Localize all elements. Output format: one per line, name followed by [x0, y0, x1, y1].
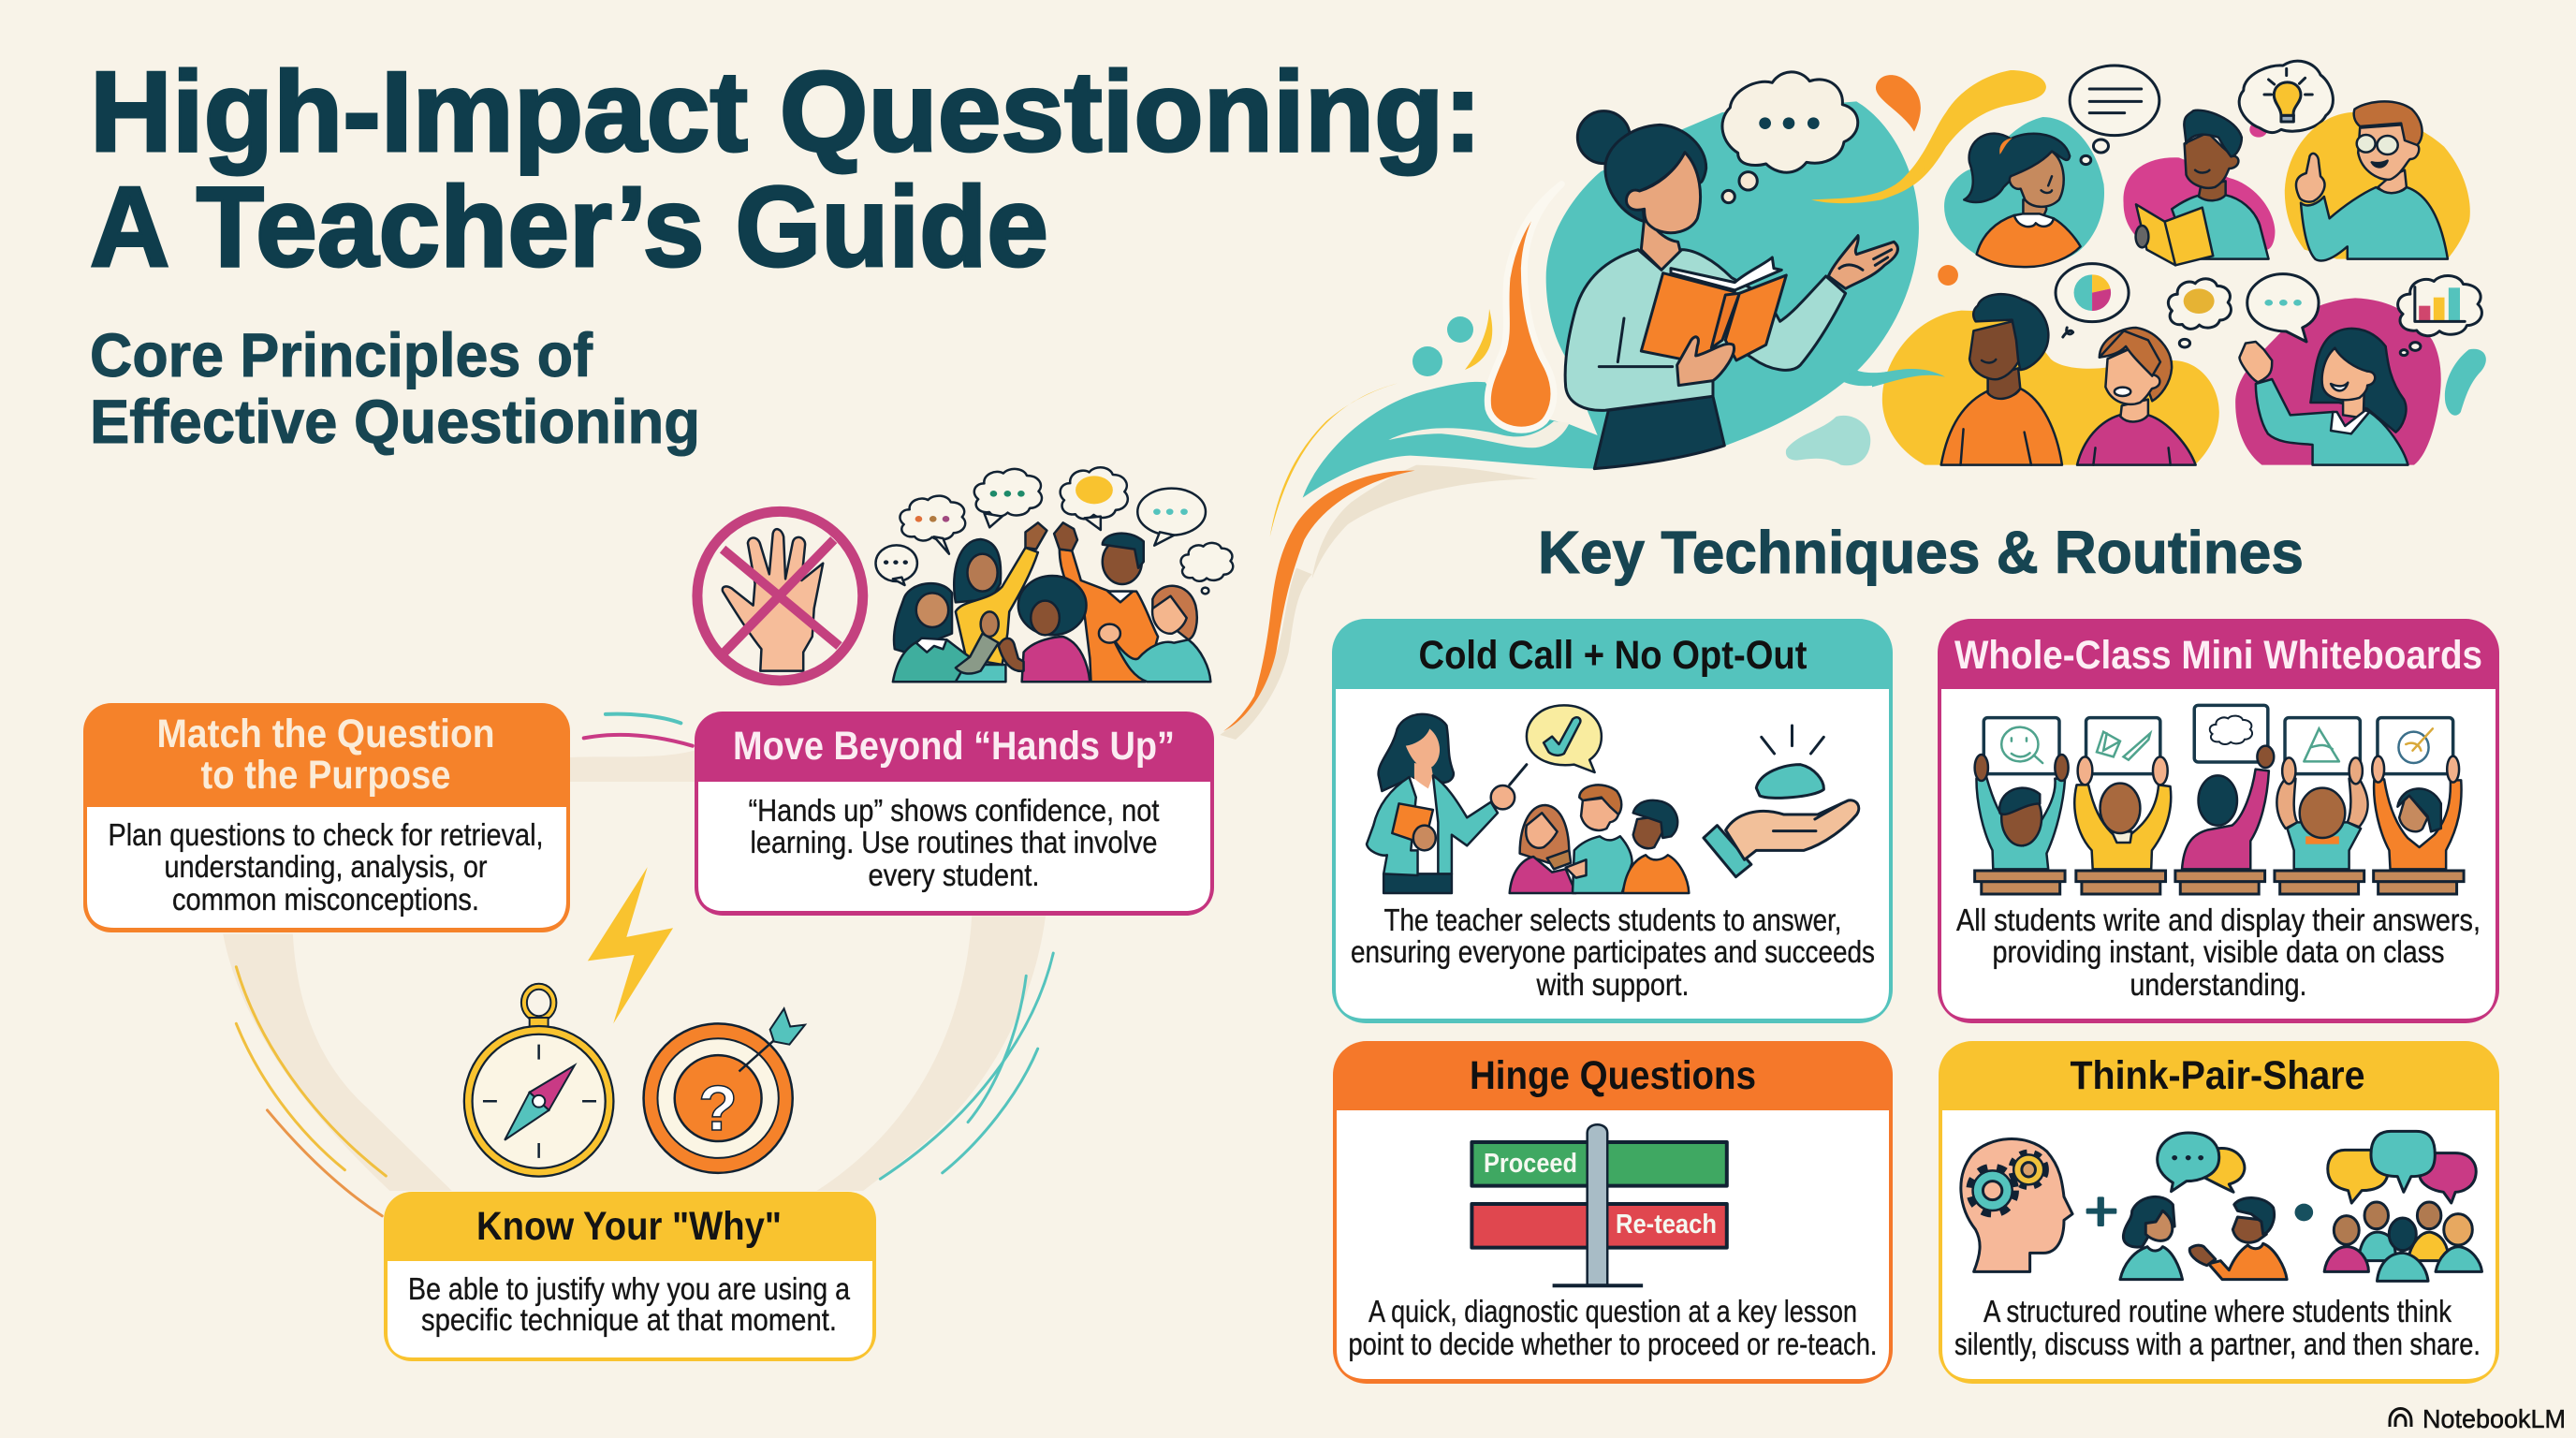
student four: [2276, 757, 2368, 869]
yellow blob: [1882, 311, 2219, 465]
principle card: know your why: [384, 1192, 876, 1361]
idea cloud with scribble: [2168, 279, 2231, 347]
subtitle: core principles: Core Principles of: [90, 320, 593, 389]
illustration: think plus pair plus share: [1961, 1131, 2481, 1281]
card heading: to the Purpose: [200, 753, 451, 798]
illustration: signpost: [1471, 1124, 1727, 1285]
teal leaf: [2445, 349, 2486, 416]
icon: lightning bolt: [588, 867, 673, 1023]
whiteboard drawings: [2001, 727, 2433, 763]
principle card: match the question: [83, 703, 570, 932]
principle card: move beyond hands up: [695, 712, 1214, 916]
title: [90, 48, 1482, 290]
student: boy with book: [2123, 110, 2275, 265]
student one: [1975, 755, 2069, 869]
subtitle: core principles: Effective Questioning: [90, 387, 700, 456]
student: boy in magenta: [2077, 328, 2196, 465]
student: boy in orange: [1941, 294, 2062, 465]
subtitle: core principles: [90, 320, 700, 456]
bubble contents: [884, 476, 1188, 565]
icon: compass: [468, 987, 609, 1172]
illustration: bottom row of students: [1872, 264, 2486, 465]
card text: [749, 793, 1159, 892]
title: High-Impact Questioning:: [90, 48, 1482, 175]
card text: learning. Use routines that involve: [751, 825, 1157, 859]
technique card: cold call: [1332, 619, 1893, 1023]
teacher thought cloud: [1722, 72, 1858, 203]
illustration: teacher with open book: [1303, 70, 2046, 498]
answer bubble with check: [1527, 705, 1602, 772]
yellow swoosh: [1811, 70, 2046, 203]
card heading: Cold Call + No Opt-Out: [1419, 633, 1807, 678]
card heading: [157, 712, 494, 798]
card text: specific technique at that moment.: [421, 1302, 837, 1337]
card text: “Hands up” shows confidence, not: [749, 793, 1159, 828]
card heading: Hinge Questions: [1470, 1053, 1756, 1098]
teal wave: [1841, 366, 1945, 386]
speech bubble with dots: [2247, 274, 2319, 342]
heading: key techniques: Key Techniques & Routines: [1538, 519, 2304, 586]
connecting swooshes from hero to cards: [1220, 383, 1538, 740]
open hand with stone: [1704, 726, 1859, 877]
card text: [109, 817, 543, 917]
share: bubbles and group: [2324, 1131, 2481, 1281]
pie chart bubble: [2056, 264, 2129, 337]
student: man with glasses: [2285, 101, 2470, 261]
whiteboards: [1983, 705, 2453, 774]
card text: ensuring everyone participates and succeeds: [1351, 934, 1875, 969]
card text: A quick, diagnostic question at a key lesson: [1368, 1294, 1857, 1328]
illustration: top row of students: [1944, 61, 2470, 267]
icon: question target with arrow: [644, 1008, 805, 1173]
illustration: teacher calling on students: [1367, 705, 1859, 893]
card text: The teacher selects students to answer,: [1383, 902, 1842, 937]
card text: Plan questions to check for retrieval,: [109, 817, 543, 852]
bar chart cloud: [2398, 276, 2481, 356]
card heading: Move Beyond “Hands Up”: [733, 724, 1175, 769]
orange teardrop: [1876, 75, 1921, 132]
plus and dot: [2086, 1196, 2313, 1226]
lightbulb cloud: [2239, 61, 2341, 149]
NotebookLM logo and wordmark: NotebookLM: [2422, 1404, 2566, 1433]
question mark: ?: [698, 1073, 738, 1144]
speech bubbles above crowd: [876, 467, 1233, 594]
teal background blob and swoosh: [1303, 101, 1919, 498]
white wave accent: [1388, 421, 1570, 448]
card text: All students write and display their answers,: [1956, 902, 2481, 937]
card text: A structured routine where students think: [1983, 1294, 2452, 1328]
light teal blob: [1786, 416, 1870, 465]
head with gears: [1961, 1139, 2072, 1271]
card heading: Whole-Class Mini Whiteboards: [1954, 633, 2482, 678]
three students: [1510, 785, 1689, 893]
card text: silently, discuss with a partner, and then share.: [1954, 1327, 2481, 1361]
card text: with support.: [1536, 967, 1689, 1002]
card text: [1954, 1294, 2481, 1361]
teacher: [1367, 714, 1527, 893]
card text: Be able to justify why you are using a: [408, 1271, 851, 1306]
card heading: Think-Pair-Share: [2071, 1053, 2364, 1098]
yellow swoosh front part: [1811, 154, 1925, 203]
pair: bubbles and people: [2120, 1133, 2287, 1280]
card text: every student.: [869, 858, 1039, 892]
card heading: Know Your "Why": [476, 1204, 782, 1249]
card heading: Match the Question: [157, 712, 494, 756]
speech bubble with lines: [2070, 66, 2159, 165]
card text: providing instant, visible data on class: [1992, 934, 2445, 969]
teal wave tip: [1872, 369, 1945, 387]
magenta blob: [2235, 298, 2441, 465]
card text: [1351, 902, 1875, 1002]
title: A Teacher’s Guide: [90, 163, 1048, 290]
crowd of five students: [893, 522, 1210, 682]
sign labels: Proceed: [1484, 1149, 1577, 1179]
decorative teal dots and yellow curl: [1412, 309, 1492, 376]
icon: crossed-out raised hand: [697, 511, 863, 681]
technique card: whole-class mini whiteboards: [1938, 619, 2499, 1023]
sign labels: Re-teach: [1616, 1210, 1717, 1240]
student two: [2074, 756, 2171, 869]
student: girl with ponytail: [1944, 117, 2104, 267]
illustration: students holding whiteboards: [1975, 705, 2464, 894]
row of desks: [1975, 871, 2464, 894]
teacher figure: [1565, 111, 1897, 469]
card text: understanding, analysis, or: [165, 849, 488, 884]
student five: [2372, 756, 2462, 869]
technique card: hinge questions: [1333, 1041, 1893, 1384]
card text: understanding.: [2130, 967, 2306, 1002]
cycle: connectors between principles: [223, 714, 1053, 1216]
orange dot: [1938, 265, 1958, 286]
student: girl waving: [2239, 329, 2408, 465]
card text: [1956, 902, 2481, 1002]
student three: [2182, 746, 2274, 869]
card text: [408, 1271, 851, 1337]
card text: point to decide whether to proceed or re-teach.: [1348, 1327, 1878, 1361]
orange flame: [1487, 184, 1561, 430]
illustration: group of students and speech bubbles: [876, 467, 1233, 682]
card text: [1348, 1294, 1878, 1361]
card text: common misconceptions.: [172, 882, 479, 917]
technique card: think-pair-share: [1939, 1041, 2499, 1384]
sign labels: [1484, 1149, 1717, 1240]
cloud drawing on third board: [2210, 716, 2252, 744]
